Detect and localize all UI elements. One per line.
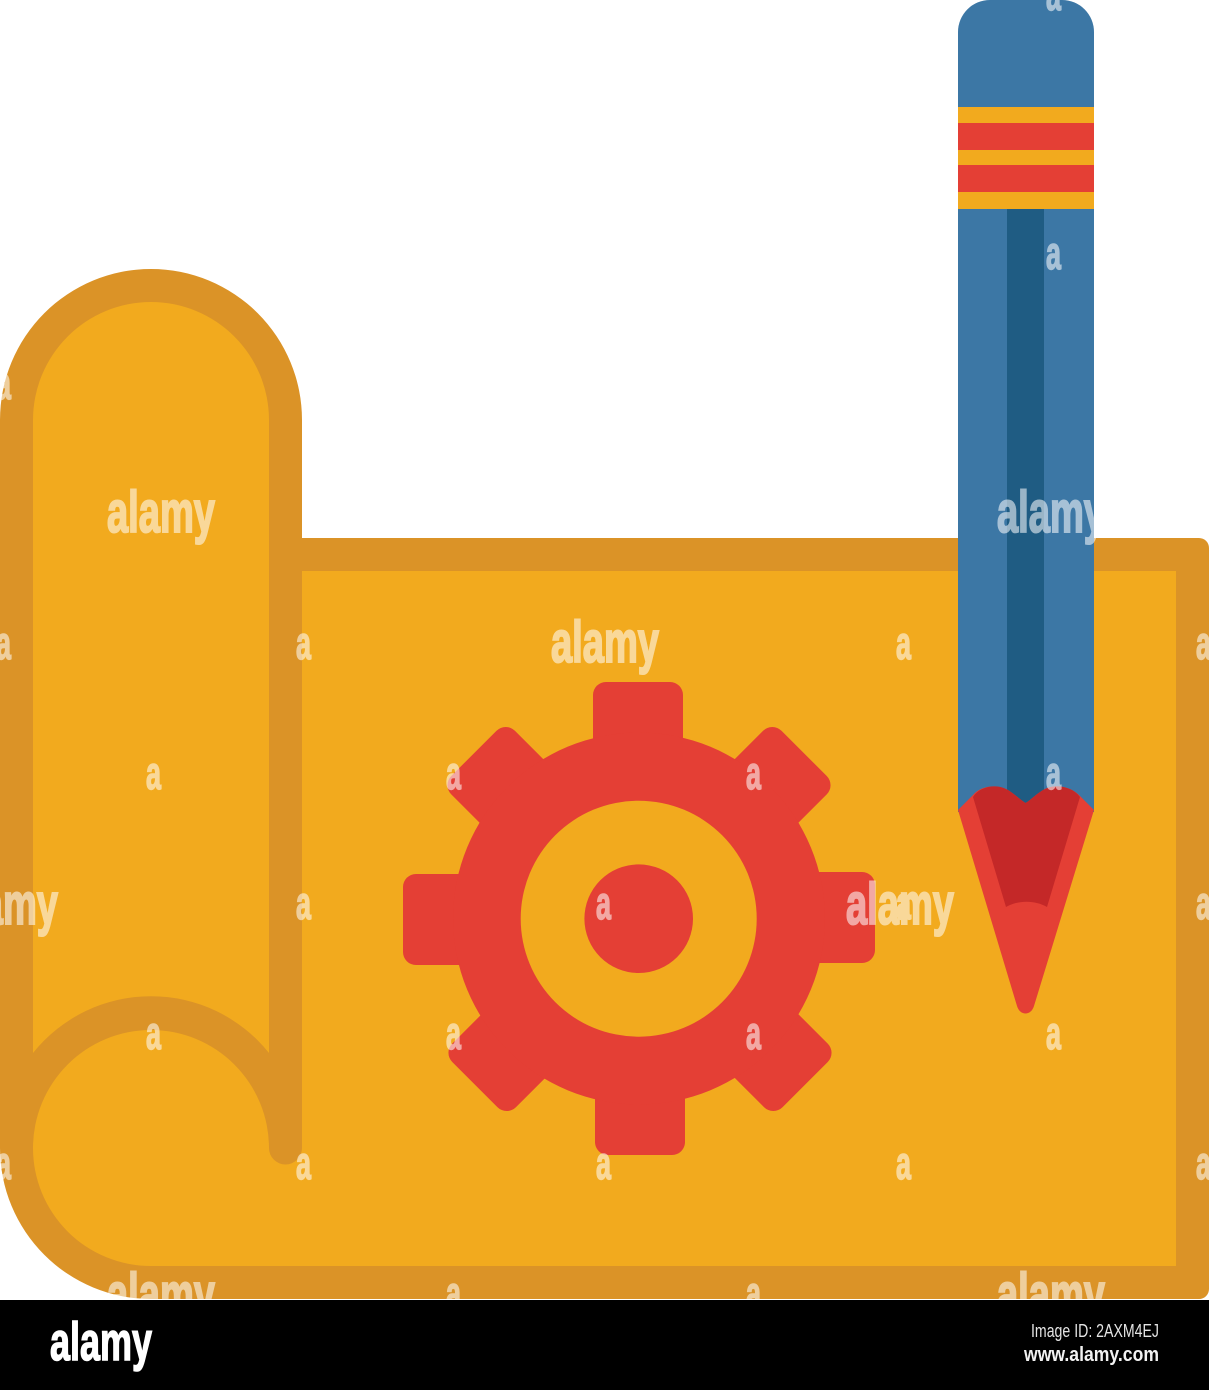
rolled paper top [33, 302, 269, 1053]
small watermark letters: a [596, 1137, 611, 1189]
pencil bands [958, 107, 1094, 209]
large watermark words [0, 480, 1105, 1327]
large watermark words: alamy [997, 480, 1105, 545]
small watermark letters: a [146, 1007, 161, 1059]
small watermark letters: a [896, 877, 911, 929]
small watermark letters: a [446, 1267, 461, 1319]
icon: pencil [958, 0, 1094, 1014]
small watermark letters: a [746, 1007, 761, 1059]
large watermark words: alamy [107, 1262, 215, 1327]
small watermark letters: a [1046, 227, 1061, 279]
image id: Image ID: 2AXM4EJ [1031, 1321, 1159, 1341]
large watermark words: alamy [107, 480, 215, 545]
scroll outline [0, 269, 1209, 1299]
pencil wood shadow [973, 786, 1080, 907]
pencil tip [958, 786, 1094, 1014]
small watermark letters: a [746, 1267, 761, 1319]
website: www.alamy.com [1023, 1344, 1159, 1366]
paper sheet [33, 571, 1176, 1266]
small watermark letters: a [896, 1137, 911, 1189]
small watermark letters: a [296, 1137, 311, 1189]
small watermark letters: a [296, 617, 311, 669]
large watermark words: alamy [551, 610, 659, 675]
small watermark letters: a [746, 747, 761, 799]
pencil centre stripe [1007, 209, 1044, 809]
small watermark letters: a [146, 747, 161, 799]
small watermark letters: a [446, 747, 461, 799]
small watermark letters: a [1046, 1007, 1061, 1059]
footer bar [0, 1300, 1209, 1390]
pencil body [958, 0, 1094, 812]
small watermark letters: a [596, 877, 611, 929]
small watermark letters: a [446, 1007, 461, 1059]
large watermark words: alamy [846, 872, 954, 937]
blueprint scroll [0, 269, 1209, 1299]
large watermark words: alamy [997, 1262, 1105, 1327]
small watermark letters: a [296, 877, 311, 929]
small watermark letters: a [1046, 747, 1061, 799]
icon: gear [403, 682, 875, 1155]
small watermark letters: a [896, 617, 911, 669]
footer logo: alamy [50, 1312, 152, 1372]
